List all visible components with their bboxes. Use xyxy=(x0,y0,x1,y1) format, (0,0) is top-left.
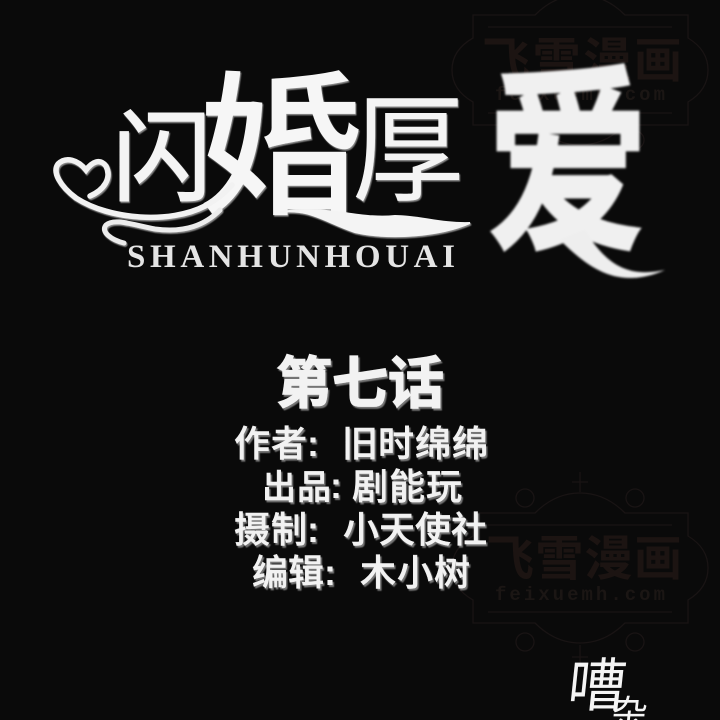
credit: author: 旧时绵绵 xyxy=(342,423,488,464)
credit: editor: 编辑 xyxy=(252,552,324,593)
title logo xyxy=(56,62,470,243)
credit: photography: : xyxy=(307,509,319,550)
credit: publisher: : xyxy=(330,465,342,506)
logo character: hun: 婚 xyxy=(198,62,363,236)
watermark: top: 飞雪漫画 xyxy=(482,35,682,88)
credit: author: 作者 xyxy=(234,423,307,464)
credit: publisher: 剧能玩 xyxy=(352,466,462,507)
credit: photography: 摄制 xyxy=(234,509,307,550)
episode heading: 第七话 xyxy=(276,352,444,415)
lower scroll swash xyxy=(104,210,220,243)
watermark: bottom: 飞雪漫画 xyxy=(486,533,682,586)
credit: author: : xyxy=(307,423,319,464)
logo subtitle: SHANHUNHOUAI xyxy=(127,239,455,275)
credit: editor: : xyxy=(324,552,336,593)
credit: editor xyxy=(252,552,470,593)
watermark: bottom xyxy=(452,472,708,668)
logo character: shan: 闪 xyxy=(112,103,212,215)
credit: editor: 木小树 xyxy=(360,552,470,593)
watermark: bottom: feixuemh.com xyxy=(495,584,665,606)
right swash xyxy=(280,210,470,236)
watermark: top: feixuemh.com xyxy=(495,84,665,106)
credit: publisher: 出品 xyxy=(262,469,331,507)
logo character: hou: 厚 xyxy=(352,86,464,218)
heart swash xyxy=(56,160,232,217)
watermark: top xyxy=(452,0,708,149)
credit: publisher xyxy=(262,465,462,507)
credit: photography: 小天使社 xyxy=(343,509,487,550)
credit: author xyxy=(234,423,488,464)
credit: photography xyxy=(234,509,487,550)
brush character: ai: 爱 xyxy=(487,51,649,276)
